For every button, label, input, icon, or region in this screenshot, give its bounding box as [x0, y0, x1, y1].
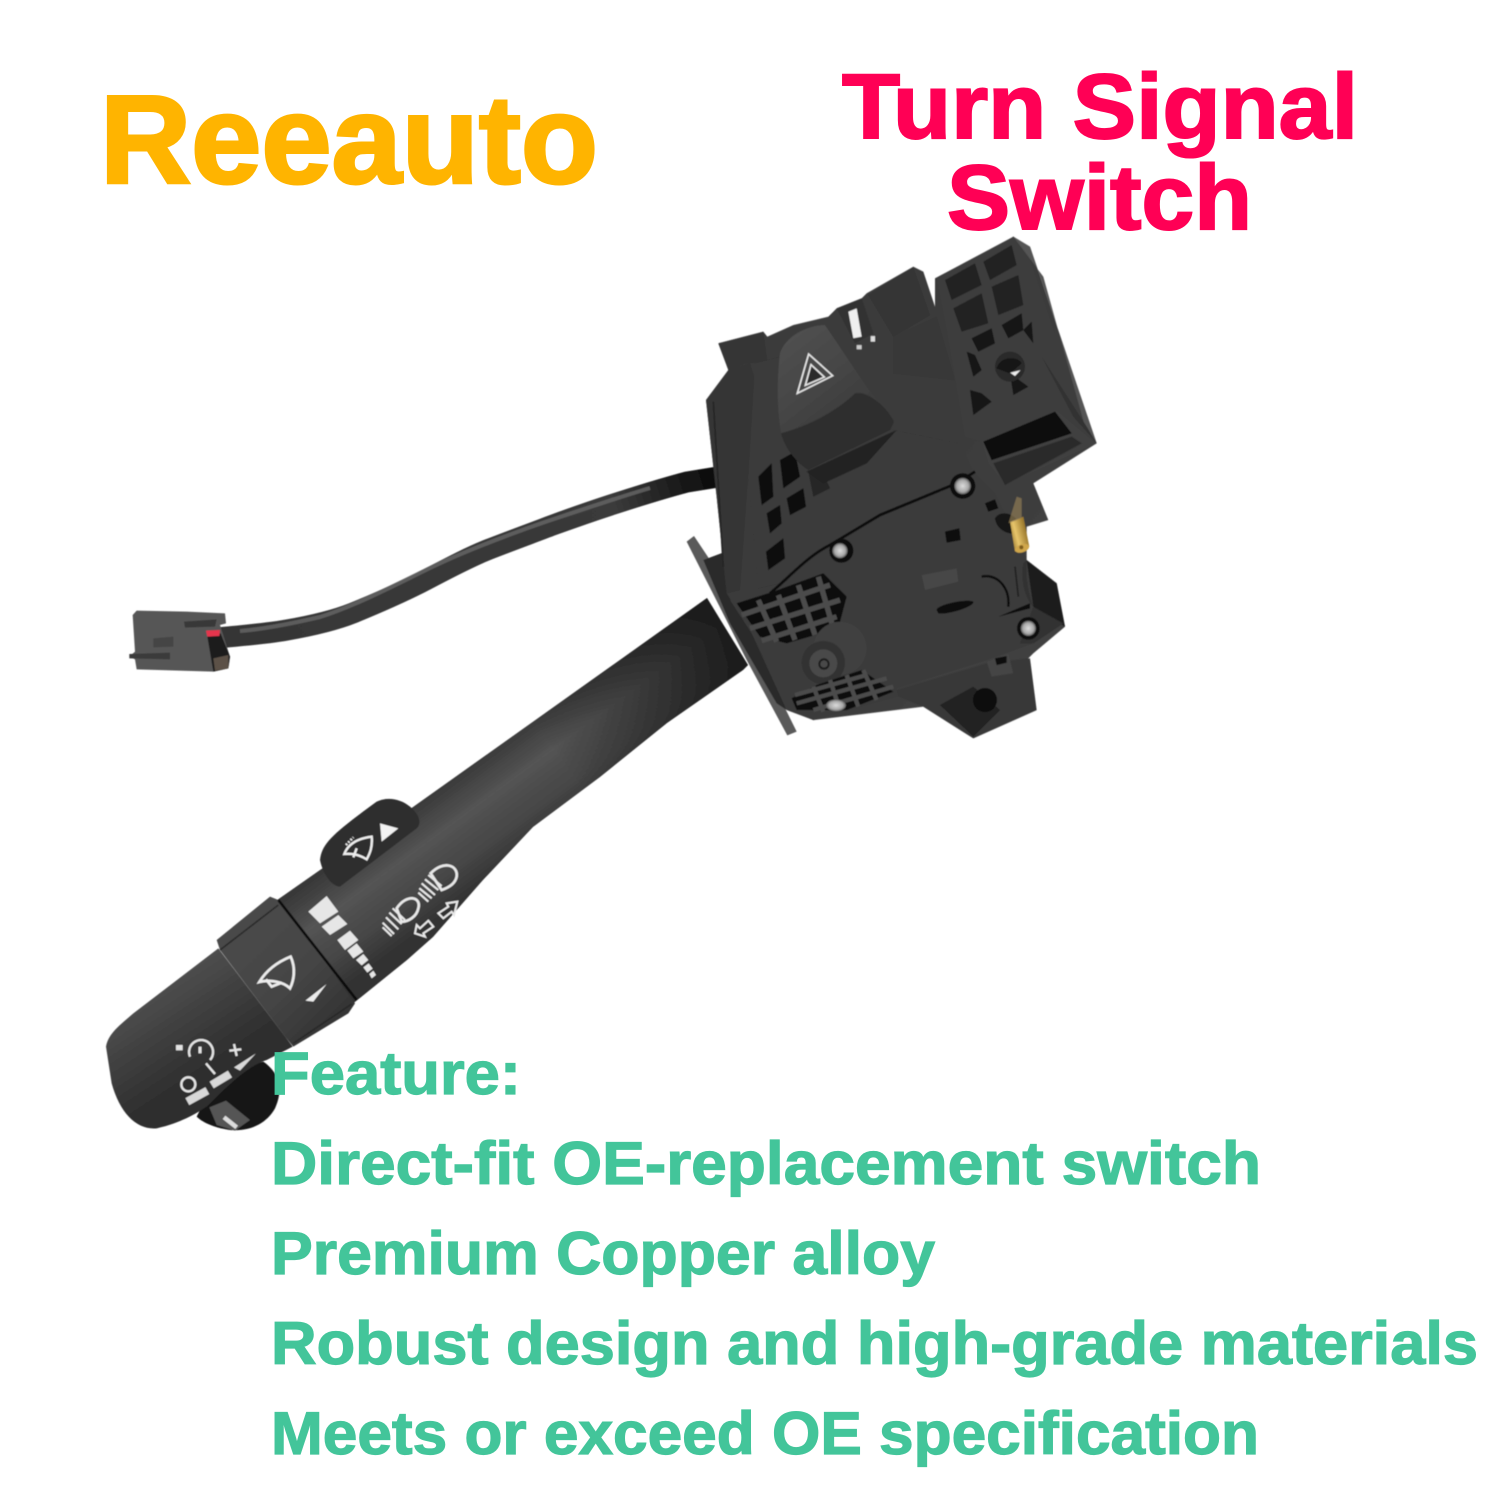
headlight symbols [383, 865, 457, 937]
lower circuit plate [730, 472, 1063, 720]
product title: Switch [947, 147, 1252, 249]
connector cavities [945, 245, 1033, 415]
screws [826, 473, 1040, 711]
top connector block [937, 237, 1085, 442]
top clip tabs [837, 298, 873, 343]
switch module housing [706, 237, 1097, 738]
feature heading: Feature: [271, 1040, 521, 1107]
product title: Turn Signal [842, 56, 1358, 158]
feature: direct fit: Direct-fit OE-replacement switch [271, 1130, 1261, 1197]
hazard button [778, 325, 897, 483]
feature: OE specification: Meets or exceed OE specification [271, 1400, 1259, 1467]
plate details [945, 528, 961, 543]
speed bars [308, 896, 376, 978]
thumb switch [209, 1101, 250, 1131]
left upper block [718, 332, 767, 370]
wiper symbol [259, 957, 327, 1002]
feature: copper alloy: Premium Copper alloy [271, 1220, 936, 1287]
bottom mounting tab [897, 658, 1037, 738]
wire harness cable [218, 477, 718, 638]
wire connector plug [129, 611, 230, 672]
knob post [802, 622, 867, 684]
brass pin [1008, 497, 1030, 554]
product title [842, 56, 1358, 249]
product photo: turn signal switch [106, 237, 1097, 1131]
cruise control symbols [176, 1040, 256, 1102]
grid ribs lower [792, 670, 893, 712]
brand name: Reeauto [100, 71, 598, 210]
lever markings and controls [106, 799, 457, 1131]
mounting flange [687, 536, 797, 735]
washer rocker button [320, 799, 419, 887]
side connector slot [982, 410, 1097, 485]
side vent openings [758, 452, 830, 570]
feature list [271, 1040, 1478, 1467]
hazard triangle symbol [797, 354, 833, 393]
wiper end cap [197, 1062, 279, 1130]
feature: robust design: Robust design and high-grade materials [271, 1310, 1478, 1377]
grid ribs upper left [737, 573, 847, 643]
main housing silhouette [706, 237, 1097, 738]
lever stalk [270, 598, 748, 1006]
rotary wiper collar [217, 897, 355, 1047]
